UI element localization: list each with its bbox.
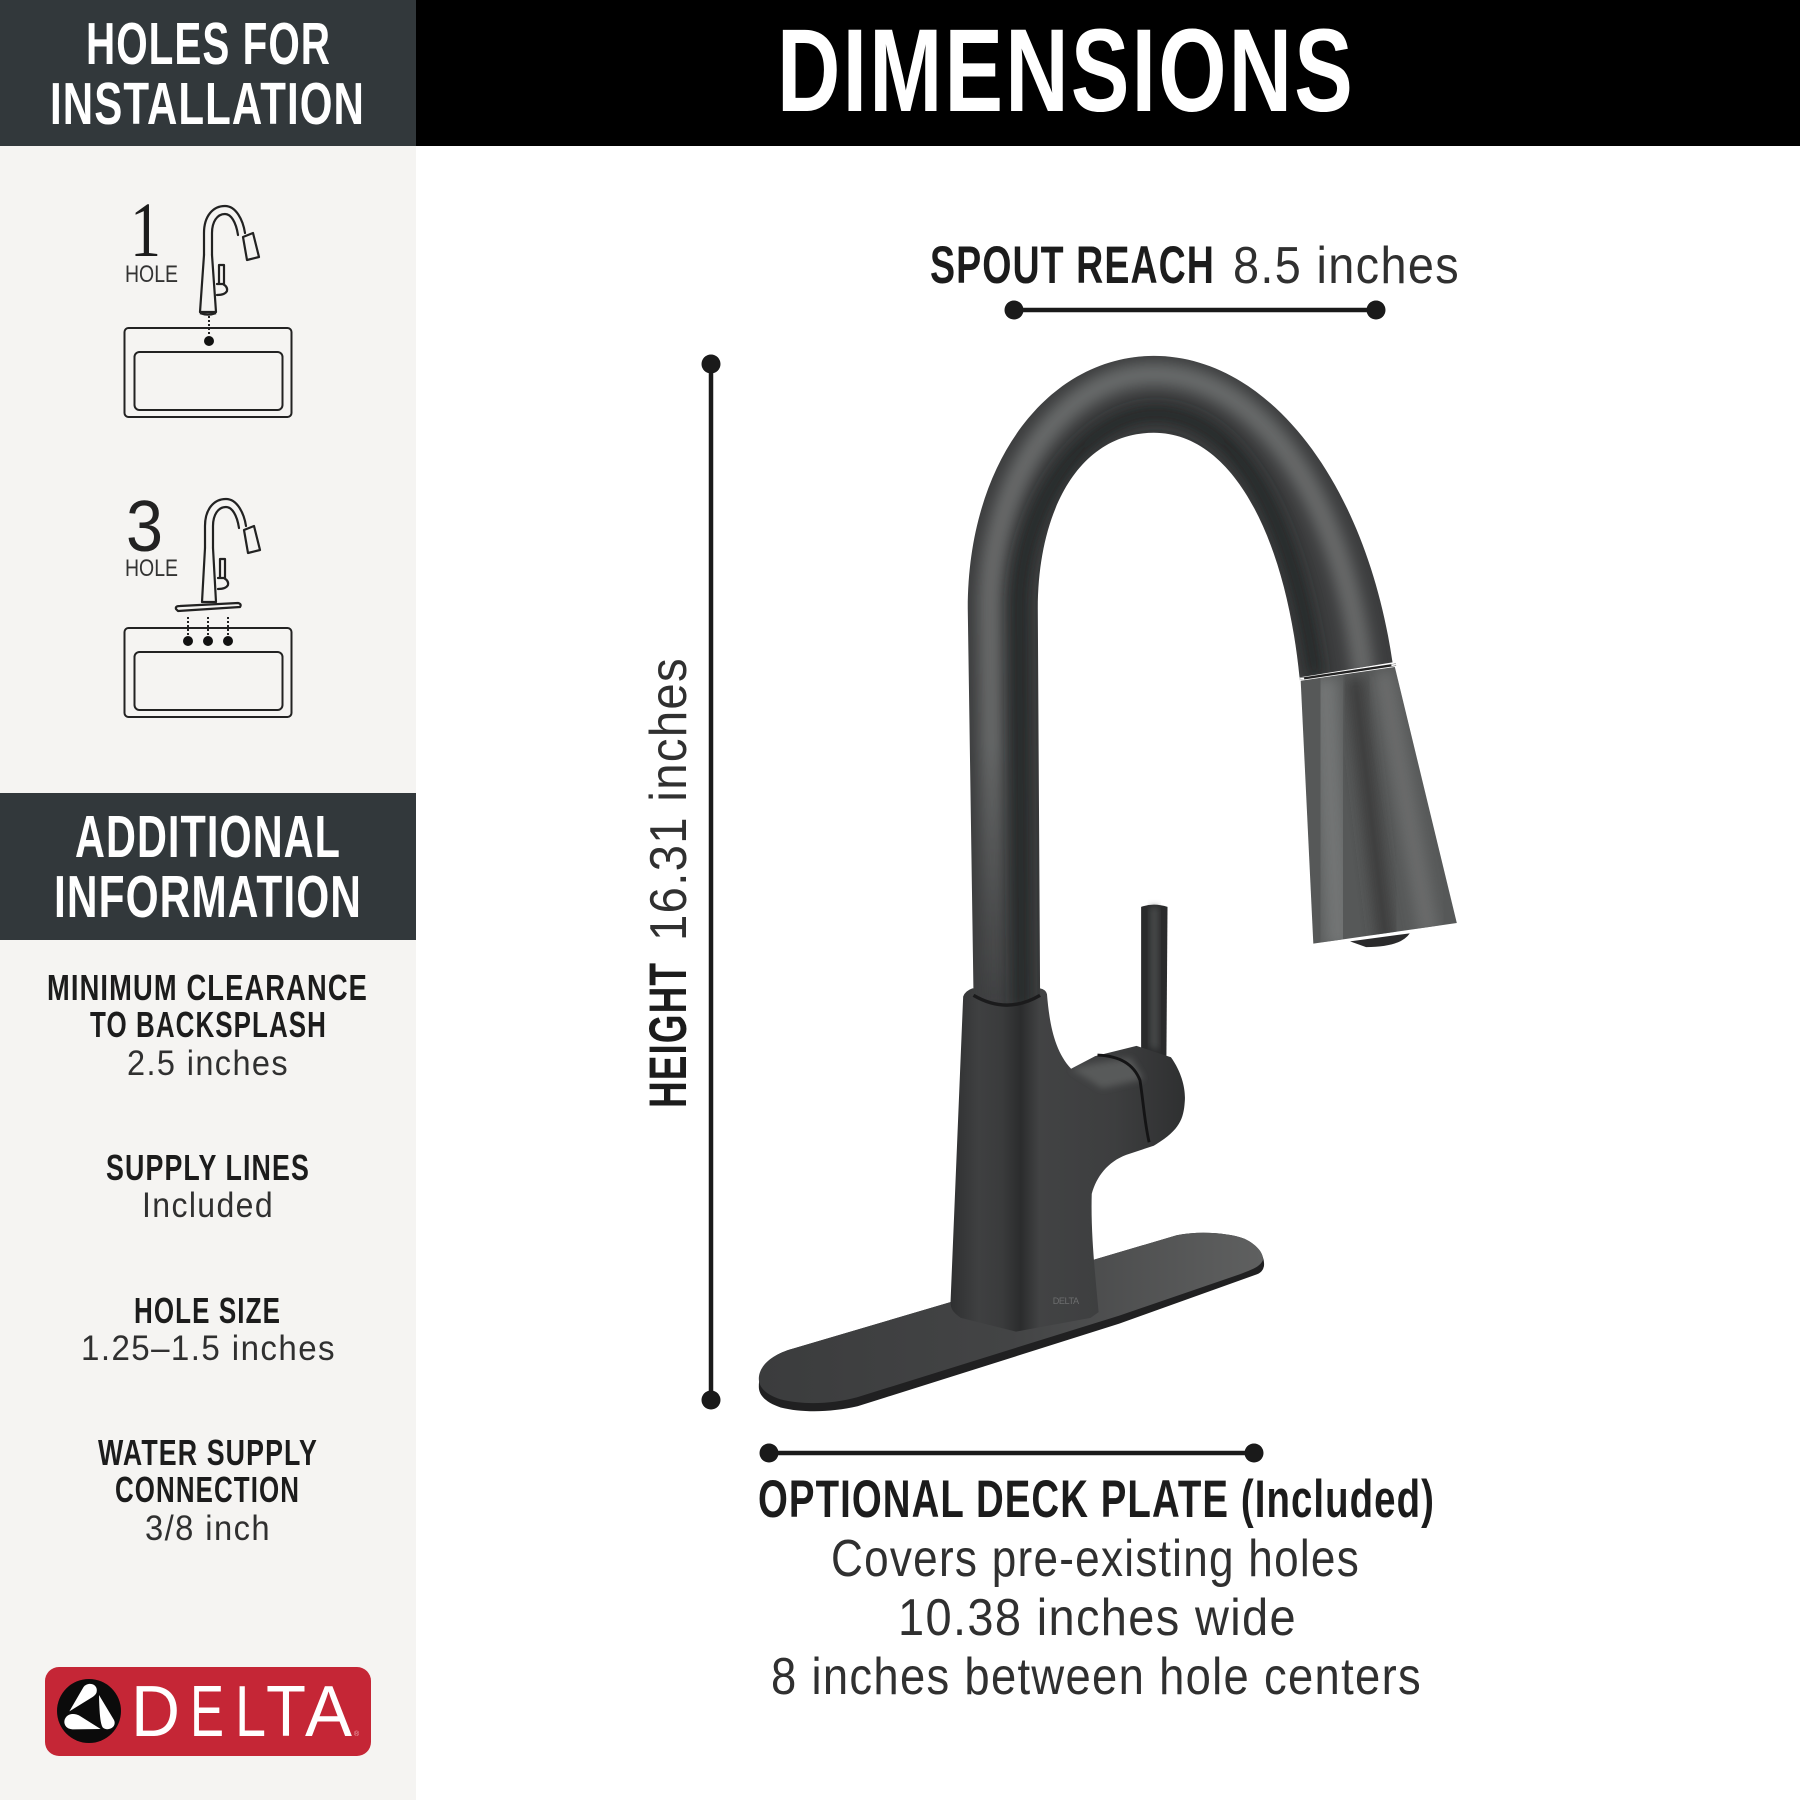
text block: water supply connection: CONNECTION [115,1469,300,1510]
spray head [1300,665,1457,947]
text block: minimum clearance: TO BACKSPLASH [90,1004,327,1045]
text block: supply lines: SUPPLY LINES [106,1147,310,1188]
text block: water supply connection: 3/8 inch [145,1509,271,1548]
dimension: optional deck plate [758,1444,1435,1706]
title bar: dimensions [416,0,1800,146]
heading: holes for installation: INSTALLATION [50,71,365,137]
heading: additional information: INFORMATION [54,864,362,930]
icon: three hole installation [124,487,292,717]
dimension: height: HEIGHT [639,962,698,1108]
icon: one hole installation [124,186,292,417]
icon: one hole installation: HOLE [125,261,178,288]
heading: holes for installation [0,0,416,146]
text block: minimum clearance: 2.5 inches [127,1044,289,1083]
product image: faucet [759,356,1457,1411]
logo: delta: D [131,1672,180,1752]
dimension: height [639,354,720,1410]
text block: supply lines [106,1147,310,1225]
deck plate [759,1233,1264,1411]
dimension: optional deck plate: 10.38 inches wide [898,1589,1297,1647]
logo: delta: L [235,1672,266,1752]
dimension: optional deck plate: Covers pre-existing holes [831,1530,1360,1588]
dimension: spout reach [930,236,1460,320]
body [951,988,1185,1332]
text block: water supply connection: WATER SUPPLY [98,1432,318,1473]
icon: three hole installation: 3 [126,487,163,567]
text block: hole size [81,1290,336,1368]
panel: left sidebar [0,0,416,1800]
dimension: spout reach: 8.5 inches [1233,237,1460,295]
heading: additional information: ADDITIONAL [75,804,341,870]
icon: three hole installation: HOLE [125,555,178,582]
body: DELTA [1053,1296,1080,1306]
text block: minimum clearance [47,967,368,1083]
dimension: optional deck plate: 8 inches between hole centers [771,1648,1422,1706]
dimension: optional deck plate: OPTIONAL DECK PLATE (Included) [758,1470,1435,1529]
logo: delta: E [190,1672,224,1752]
text block: minimum clearance: MINIMUM CLEARANCE [47,967,368,1008]
text block: supply lines: Included [142,1186,274,1225]
title bar: dimensions: DIMENSIONS [777,5,1355,137]
tube spout [968,356,1393,1010]
logo: delta [45,1667,371,1756]
dimension: spout reach: SPOUT REACH [930,236,1215,295]
handle lever [1141,905,1168,1062]
heading: holes for installation: HOLES FOR [86,11,331,77]
logo: delta: T [266,1672,306,1752]
logo: delta: A [305,1672,352,1752]
text block: hole size: HOLE SIZE [134,1290,281,1331]
text block: hole size: 1.25–1.5 inches [81,1329,336,1368]
icon: one hole installation: 1 [130,186,161,273]
logo: delta: ® [354,1730,360,1738]
text block: water supply connection [98,1432,318,1548]
dimension: height: 16.31 inches [640,657,698,941]
heading: additional information [0,793,416,940]
